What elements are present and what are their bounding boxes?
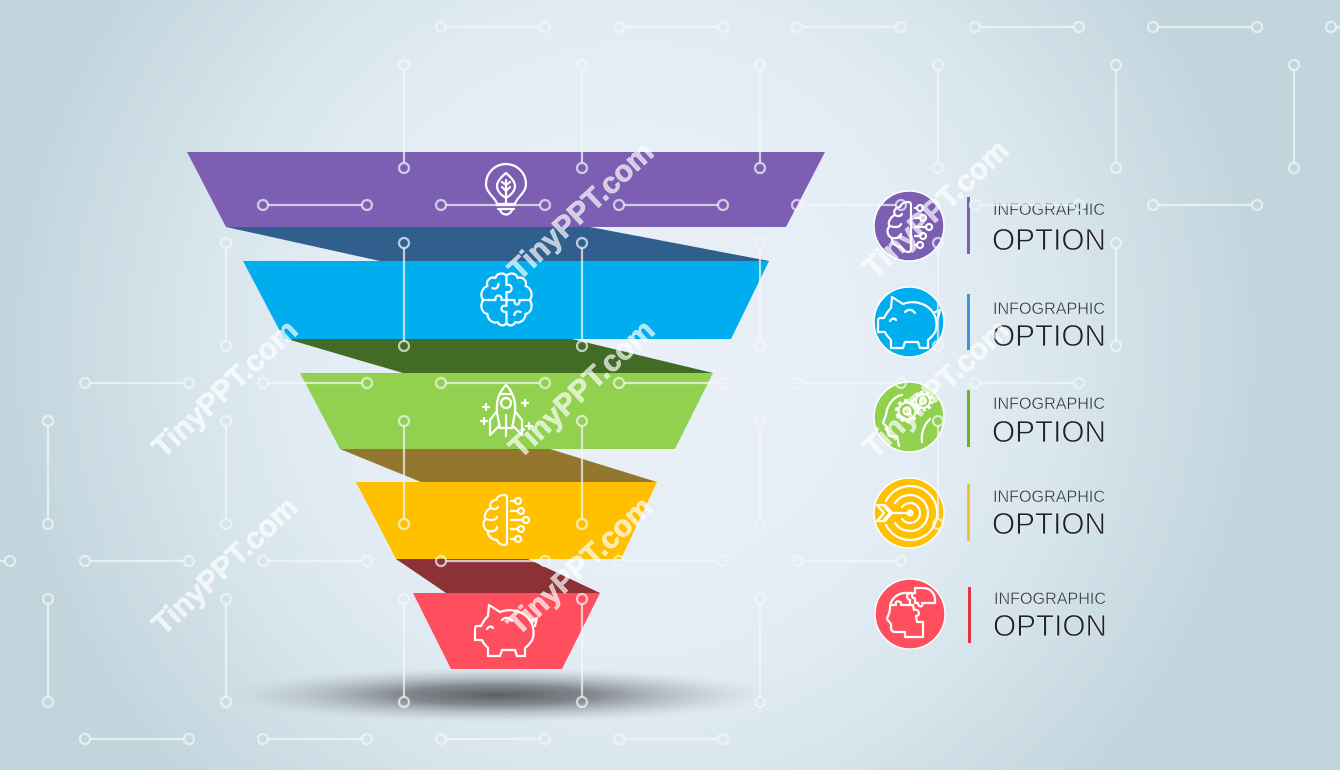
connecting fold 3 xyxy=(340,449,657,482)
funnel chart xyxy=(187,152,825,669)
icon: piggy bank xyxy=(475,605,537,656)
heading: OPTION xyxy=(992,506,1106,541)
icon: digital brain xyxy=(484,495,529,545)
label: INFOGRAPHIC xyxy=(994,589,1106,608)
label: INFOGRAPHIC xyxy=(993,487,1105,506)
funnel tier 5: red xyxy=(413,593,600,669)
badge: red head with puzzle xyxy=(875,579,945,649)
panel: option 2 xyxy=(874,287,1106,357)
heading: OPTION xyxy=(992,222,1106,257)
badge: yellow target with arrow xyxy=(874,478,944,548)
funnel tier 1: purple xyxy=(187,152,825,227)
icon: rocket xyxy=(481,385,532,436)
label: INFOGRAPHIC xyxy=(993,299,1105,318)
accent bar xyxy=(967,390,970,447)
label: INFOGRAPHIC xyxy=(993,200,1105,219)
heading: OPTION xyxy=(992,414,1106,449)
icon: puzzle brain xyxy=(481,274,532,325)
badge: green head with gears xyxy=(874,382,944,452)
panel: option 4 xyxy=(874,478,1106,548)
watermark: TinyPPT.com xyxy=(857,134,1015,285)
accent bar xyxy=(967,484,970,541)
connecting fold 2 xyxy=(287,339,713,373)
icon: light bulb with leaf xyxy=(486,164,526,214)
watermark: TinyPPT.com xyxy=(857,314,1015,465)
funnel tier 2: blue xyxy=(243,261,769,339)
funnel tier 3: green xyxy=(300,373,713,449)
badge: blue piggy bank xyxy=(874,287,944,357)
watermarks xyxy=(146,134,1015,642)
watermark: TinyPPT.com xyxy=(146,491,304,642)
funnel tier 4: yellow xyxy=(356,482,657,559)
panel: option 1 xyxy=(874,191,1106,261)
accent bar xyxy=(968,587,971,643)
accent bar xyxy=(967,294,970,350)
watermark: TinyPPT.com xyxy=(503,314,661,465)
heading: OPTION xyxy=(992,318,1106,353)
floor shadow xyxy=(219,667,775,723)
accent bar xyxy=(967,197,970,254)
panel: option 5 xyxy=(875,579,1107,649)
heading: OPTION xyxy=(993,608,1107,643)
watermark: TinyPPT.com xyxy=(502,136,660,287)
connecting fold 4 xyxy=(396,559,600,593)
watermark: TinyPPT.com xyxy=(501,491,659,642)
watermark: TinyPPT.com xyxy=(146,314,304,465)
connecting fold 1 xyxy=(226,227,769,261)
label: INFOGRAPHIC xyxy=(993,394,1105,413)
badge: purple digital brain xyxy=(874,191,944,261)
panel: option 3 xyxy=(874,382,1106,452)
